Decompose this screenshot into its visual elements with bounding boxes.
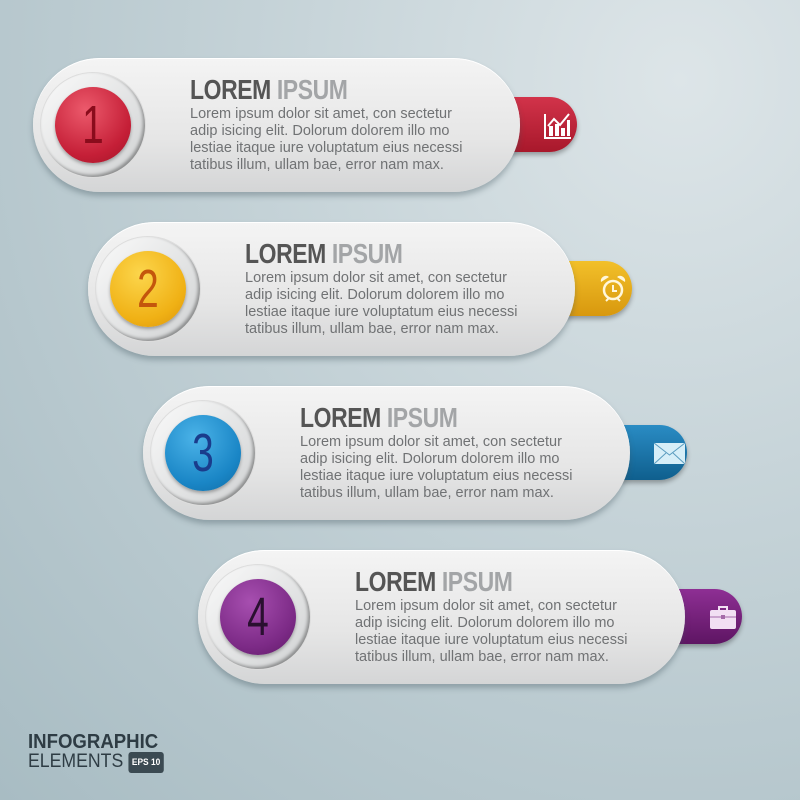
body text: lestiae itaque iure voluptatum eius necessi [300, 468, 572, 484]
pill card [143, 386, 630, 520]
tab: purple briefcase icon [638, 589, 742, 644]
number circle 1 [41, 73, 145, 177]
number circle 3: 3 [192, 423, 214, 483]
pill card [198, 550, 685, 684]
panel: item 4 [196, 550, 744, 690]
number circle 4: 4 [247, 587, 269, 647]
body text: lestiae itaque iure voluptatum eius necessi [355, 632, 627, 648]
number circle 3 [151, 401, 255, 505]
number circle 2: 2 [137, 259, 159, 319]
body text: lestiae itaque iure voluptatum eius necessi [245, 304, 517, 320]
body text: tatibus illum, ullam bae, error nam max. [355, 649, 609, 665]
pill card [33, 58, 520, 192]
body text [300, 434, 572, 501]
footer logo [28, 731, 164, 773]
panel: item 2 [86, 222, 634, 363]
footer logo: INFOGRAPHIC [28, 731, 158, 753]
heading: LOREM IPSUM [190, 74, 348, 105]
body text: Lorem ipsum dolor sit amet, con sectetur [245, 270, 507, 286]
footer logo: EPS 10 [132, 757, 160, 767]
body text [245, 270, 517, 337]
body text: adip isicing elit. Dolorum dolorem illo mo [190, 123, 450, 139]
footer logo: ELEMENTS [28, 751, 123, 772]
body text: tatibus illum, ullam bae, error nam max. [245, 321, 499, 337]
body text [190, 106, 462, 173]
body text: tatibus illum, ullam bae, error nam max. [300, 485, 554, 501]
number circle 2 [96, 237, 200, 341]
tab: red chart icon [473, 97, 577, 152]
pill card [88, 222, 575, 356]
number circle 1: 1 [82, 95, 104, 155]
body text: adip isicing elit. Dolorum dolorem illo mo [355, 615, 614, 631]
panel: item 3 [140, 386, 690, 526]
body text: Lorem ipsum dolor sit amet, con sectetur [190, 106, 452, 122]
tab: blue mail icon [583, 425, 687, 480]
body text: Lorem ipsum dolor sit amet, con sectetur [300, 434, 562, 450]
body text: adip isicing elit. Dolorum dolorem illo mo [300, 451, 560, 467]
tab: yellow clock icon [528, 261, 632, 316]
body text: Lorem ipsum dolor sit amet, con sectetur [355, 598, 617, 614]
panel: item 1 [30, 58, 580, 199]
heading: LOREM IPSUM [355, 566, 513, 597]
body text [355, 598, 627, 665]
body text: tatibus illum, ullam bae, error nam max. [190, 157, 444, 173]
heading: LOREM IPSUM [245, 238, 403, 269]
body text: lestiae itaque iure voluptatum eius necessi [190, 140, 462, 156]
number circle 4 [206, 565, 310, 669]
heading: LOREM IPSUM [300, 402, 458, 433]
body text: adip isicing elit. Dolorum dolorem illo mo [245, 287, 504, 303]
